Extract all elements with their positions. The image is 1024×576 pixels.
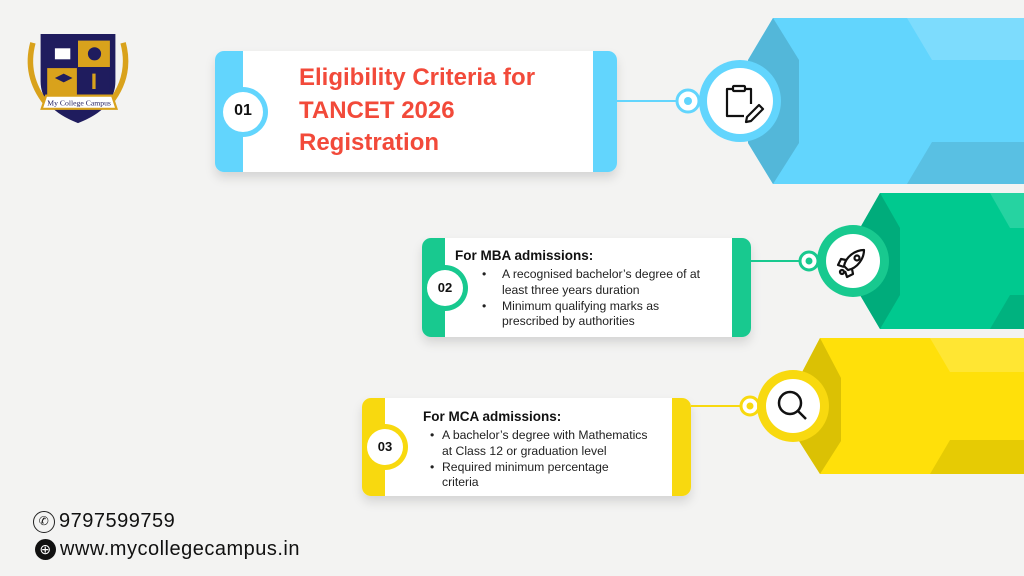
card 1: [215, 51, 617, 172]
number 03: 03: [378, 439, 392, 454]
phone contact: ✆: [39, 514, 49, 528]
connectors and icon circles: [617, 60, 889, 442]
card 3: [362, 398, 691, 496]
number 02: 02: [438, 280, 452, 295]
website contact: ⊕: [39, 541, 52, 557]
title: Registration: [299, 129, 439, 156]
text block: MCA: criteria: [442, 475, 479, 489]
website contact: www.mycollegecampus.in: [60, 538, 300, 560]
phone contact: 9797599759: [59, 510, 175, 532]
icon: clipboard: [727, 86, 763, 122]
title: [299, 64, 535, 156]
text block: MBA: For MBA admissions:: [455, 248, 593, 263]
text block: MCA: A bachelor’s degree with Mathematics at Class 12 or graduation level: [442, 428, 648, 458]
text block: MCA: [423, 409, 648, 489]
text block: MCA: For MCA admissions:: [423, 409, 561, 424]
text block: MBA: A recognised bachelor’s degree of at least three years duration: [502, 267, 700, 297]
logo: My College Campus: [47, 99, 111, 108]
card 2: [422, 238, 751, 337]
title: Eligibility Criteria for: [299, 64, 535, 91]
text block: MBA: [455, 248, 700, 328]
text block: MBA: Minimum qualifying marks as prescribed by authorities: [502, 299, 659, 328]
hexagon band: yellow: [799, 338, 1024, 474]
icon: rocket: [838, 250, 864, 277]
hexagon band: blue: [748, 18, 1024, 184]
title: TANCET 2026: [299, 96, 455, 124]
text block: MCA: Required minimum percentage: [442, 460, 609, 474]
number 01: 01: [234, 102, 252, 119]
hexagon band: green: [860, 193, 1024, 329]
logo: [30, 34, 126, 123]
icon: magnifier: [779, 392, 806, 419]
